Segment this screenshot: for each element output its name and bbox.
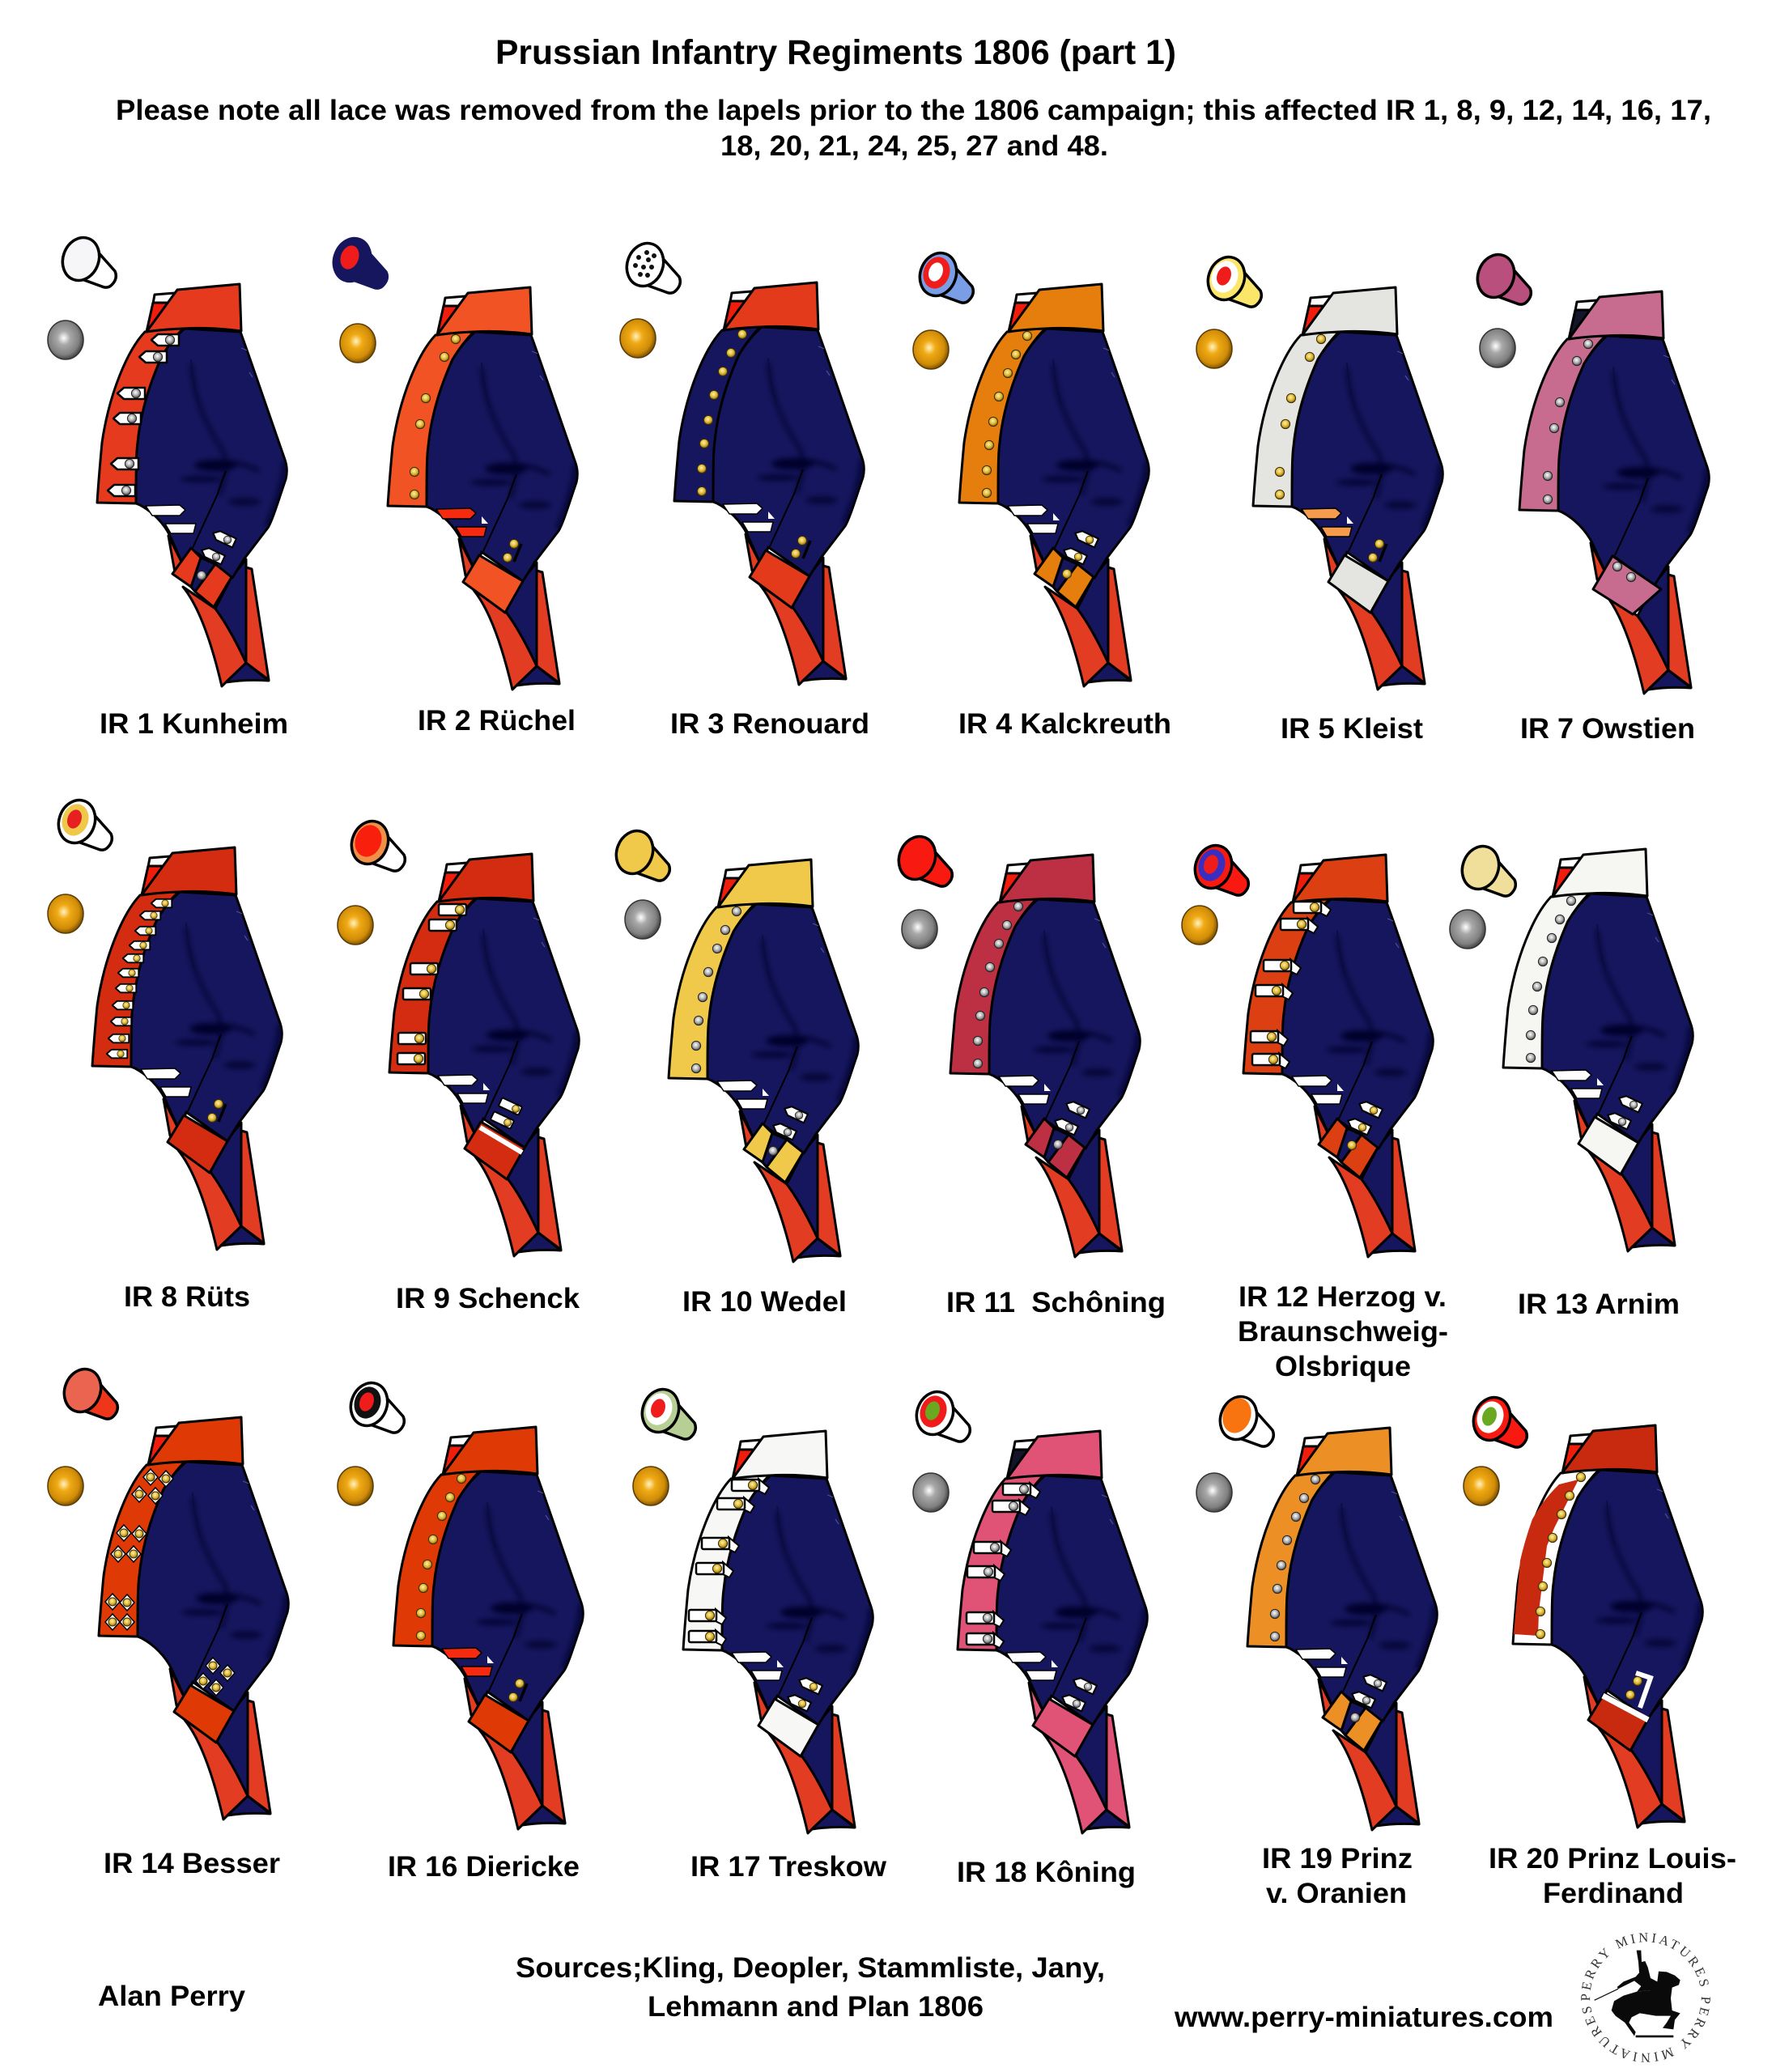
label IR 7: IR 7 Owstien	[1520, 713, 1695, 745]
coat IR 1	[97, 284, 287, 686]
icon: cockade IR 19	[1214, 1391, 1273, 1446]
coat IR 5	[1253, 287, 1442, 690]
regiment: IR 7 Owstien	[1472, 249, 1709, 745]
regiment: IR 8 Rüts	[48, 795, 282, 1313]
coat IR 7	[1519, 291, 1709, 694]
regiment: IR 17 Treskow	[633, 1384, 887, 1883]
label IR 9: IR 9 Schenck	[396, 1283, 580, 1314]
icon: button IR 10	[625, 900, 661, 939]
icon: button IR 17	[633, 1467, 669, 1505]
sources text block	[516, 1952, 1105, 2023]
icon: cockade IR 11	[893, 831, 952, 886]
label IR 12: Braunschweig-	[1238, 1316, 1448, 1348]
label IR 3: IR 3 Renouard	[670, 708, 869, 740]
regiment: IR 2 Rüchel	[328, 233, 577, 737]
icon: cockade IR 14	[58, 1364, 117, 1419]
icon: cockade IR 17	[636, 1384, 695, 1439]
icon: button IR 16	[338, 1467, 373, 1505]
author credit: Alan Perry	[98, 1981, 246, 2012]
regiment: IR 13 Arnim	[1450, 841, 1693, 1320]
icon: cockade IR 10	[610, 826, 669, 881]
label IR 5: IR 5 Kleist	[1281, 713, 1423, 745]
logo: Perry Miniatures roundel: PERRY MINIATURES PERRY MINIATURES	[1581, 1933, 1710, 2062]
label IR 12: Olsbrique	[1275, 1351, 1411, 1382]
icon: button IR 13	[1450, 910, 1485, 949]
icon: button IR 5	[1196, 329, 1232, 368]
icon: button IR 19	[1196, 1473, 1232, 1512]
coat IR 8	[92, 847, 282, 1250]
regiment: IR 4 Kalckreuth	[913, 248, 1171, 740]
regiment: IR 16 Dierick	[338, 1378, 583, 1883]
label IR 2: IR 2 Rüchel	[418, 705, 576, 737]
label IR 12: IR 12 Herzog v.	[1239, 1281, 1447, 1313]
icon: button IR 9	[338, 906, 373, 945]
icon: cockade IR 3	[621, 238, 680, 293]
icon: cockade IR 7	[1472, 249, 1531, 304]
icon: cockade IR 5	[1202, 252, 1261, 307]
icon: cockade IR 16	[345, 1378, 404, 1433]
coat IR 12	[1243, 855, 1433, 1257]
icon: cockade IR 12	[1189, 840, 1248, 895]
icon: button IR 8	[48, 894, 83, 933]
regiment: IR 19 Prinz v. Oranien	[1196, 1391, 1437, 1909]
regiment: IR 20 Prinz Louis-Ferdinand	[1464, 1392, 1736, 1909]
label IR 19: v. Oranien	[1266, 1878, 1407, 1909]
icon: cockade IR 8	[53, 795, 112, 850]
label IR 13: IR 13 Arnim	[1518, 1289, 1680, 1320]
icon: button IR 11	[902, 910, 937, 949]
label IR 10: IR 10 Wedel	[682, 1286, 847, 1318]
regiment: IR 1 Kunheim	[48, 232, 288, 740]
coat IR 20	[1513, 1425, 1702, 1828]
coat IR 18	[958, 1431, 1147, 1833]
regiment: IR 18 Kôning	[911, 1386, 1147, 1888]
label IR 19: IR 19 Prinz	[1262, 1843, 1413, 1875]
coat IR 4	[959, 284, 1149, 686]
icon: button IR 4	[913, 330, 949, 369]
regiment: IR 12 Herzog v. Braunschweig-Olsbrique	[1182, 840, 1448, 1382]
regiment: IR 11 Schôning	[893, 831, 1166, 1318]
icon: cockade IR 20	[1468, 1392, 1527, 1447]
label IR 11: IR 11 Schôning	[946, 1287, 1166, 1318]
coat IR 19	[1247, 1428, 1437, 1830]
label IR 18: IR 18 Kôning	[957, 1857, 1136, 1888]
icon: cockade IR 18	[911, 1386, 970, 1441]
regiment: IR 9 Schenck	[338, 816, 580, 1314]
icon: cockade IR 2	[328, 233, 387, 288]
icon: button IR 20	[1464, 1467, 1499, 1505]
note text block	[116, 95, 1711, 162]
icon: button IR 12	[1182, 906, 1217, 945]
label IR 16: IR 16 Diericke	[388, 1851, 580, 1883]
icon: button IR 14	[48, 1467, 83, 1505]
sources text block: Sources;Kling, Deopler, Stammliste, Jany,	[516, 1952, 1105, 1984]
icon: cockade IR 13	[1456, 841, 1515, 896]
label IR 4: IR 4 Kalckreuth	[958, 708, 1171, 740]
label IR 20	[1489, 1843, 1736, 1909]
label IR 12	[1238, 1281, 1448, 1382]
icon: button IR 2	[340, 324, 376, 363]
icon: cockade IR 9	[346, 816, 405, 871]
regiment: IR 3 Renouard	[620, 238, 869, 740]
label IR 19	[1262, 1843, 1413, 1909]
website: www.perry-miniatures.com	[1174, 2002, 1553, 2033]
label IR 8: IR 8 Rüts	[124, 1281, 250, 1313]
label IR 17: IR 17 Treskow	[690, 1851, 887, 1883]
coat IR 9	[389, 854, 579, 1256]
icon: button IR 18	[913, 1473, 949, 1512]
icon: button IR 7	[1480, 329, 1515, 367]
label IR 20: Ferdinand	[1543, 1878, 1684, 1909]
coat IR 16	[393, 1427, 583, 1829]
coat IR 13	[1503, 849, 1693, 1251]
label IR 14: IR 14 Besser	[104, 1848, 280, 1879]
icon: cockade IR 1	[57, 232, 116, 287]
coat IR 14	[99, 1417, 288, 1819]
note text block: Please note all lace was removed from the lapels prior to the 1806 campaign; this affected IR 1, 8, 9, 12, 14, 16, 17,	[116, 95, 1711, 126]
coat IR 10	[669, 860, 858, 1262]
coat IR 17	[683, 1431, 873, 1833]
regiment: IR 10 Wedel	[610, 826, 858, 1318]
note text block: 18, 20, 21, 24, 25, 27 and 48.	[720, 130, 1108, 162]
regiment: IR 5 Kleist	[1196, 252, 1442, 745]
icon: cockade IR 4	[914, 248, 973, 303]
coat IR 11	[950, 855, 1140, 1257]
label IR 20: IR 20 Prinz Louis-	[1489, 1843, 1736, 1875]
title: Prussian Infantry Regiments 1806 (part 1)	[495, 33, 1176, 72]
coat IR 2	[388, 287, 577, 690]
label IR 1: IR 1 Kunheim	[100, 708, 288, 740]
icon: button IR 1	[48, 321, 83, 359]
icon: button IR 3	[620, 319, 656, 358]
coat IR 3	[674, 282, 864, 685]
sources text block: Lehmann and Plan 1806	[648, 1991, 984, 2023]
regiment: IR 14 Besser	[48, 1364, 288, 1879]
